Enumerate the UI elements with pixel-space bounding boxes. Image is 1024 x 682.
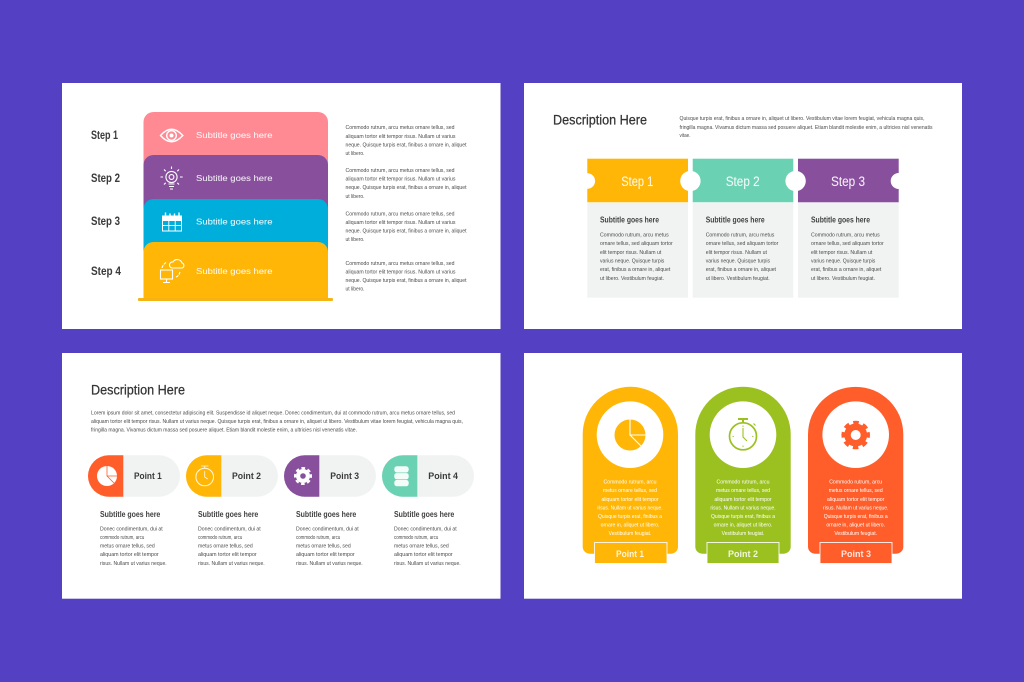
intro text: Quisque turpis erat, finibus a ornare in, aliquet ut libero. Vestibulum vitae lorem feugiat, vehicula magna quis, [680,116,925,122]
card text: step 2: Subtitle goes here [706,216,765,225]
layer subtitles: Subtitle goes here [196,216,273,226]
intro text: vitae. [680,133,691,139]
step headers: Step 2 [726,174,760,189]
descriptions: neque. Quisque turpis erat, finibus a ornare in, aliquet [346,229,467,235]
arch card 2: aliquam tortor elit tempor [714,497,772,503]
point text 2: Donec condimentum, dui at [198,527,261,533]
intro text: fringilla magna. Vivamus dictum massa sed posuere aliquet. Etiam blandit molestie enim, a ultricies nisl venenatis [680,125,933,131]
point text 1: aliquam tortor elit tempor [100,552,159,558]
point text 3: aliquam tortor elit tempor [296,552,355,558]
card text: step 3: varius neque. Quisque turpis [811,259,875,265]
heading: Description Here [553,112,647,128]
arch card 3 [808,387,903,564]
card text: step 3: Subtitle goes here [811,216,871,225]
point pill 1: Point 1 [134,471,162,482]
point text 1: metus ornare tellus, sed [100,544,155,550]
step headers: Step 3 [831,174,865,189]
descriptions: aliquam tortor elit tempor risus. Nullam ut varius [346,134,456,140]
point pill 2: Point 2 [232,471,261,482]
arch card 1: metus ornare tellus, sed [603,488,657,494]
step headers: Step 1 [621,174,653,189]
card text: step 2: Commodo rutrum, arcu metus [706,233,774,239]
point text 2 [198,510,265,567]
icon: light bulb [160,166,183,189]
arch card 3: aliquam tortor elit tempor [827,497,884,503]
step labels [91,130,122,278]
card text: step 2 [706,216,778,282]
point pill 1 [88,455,180,497]
icon: stopwatch [730,419,756,450]
card text: step 3 [811,216,884,282]
descriptions: neque. Quisque turpis erat, finibus a ornare in, aliquet [346,142,467,148]
step labels: Step 3 [91,216,120,228]
layer subtitles: Subtitle goes here [196,266,273,276]
card text: step 3: Commodo rutrum, arcu metus [811,233,880,239]
card text: step 1 [600,216,673,282]
tab: Point 2 [728,549,758,560]
point text 3: commodo rutrum, arcu [296,535,340,541]
point text 4: Donec condimentum, dui at [394,527,457,533]
intro text: aliquam tortor elit tempor risus. Nullam ut varius neque. Quisque turpis erat, finibus a ornare in, aliquet ut libero. Vestibulum vitae lorem feugiat, vehicula magna quis, [91,419,463,425]
arch card 1: Vestibulum feugiat. [609,531,652,537]
layer subtitles: Subtitle goes here [196,130,273,140]
tab [820,542,892,564]
descriptions: ut libero. [346,287,365,293]
arch card 2: ornare in, aliquet ut libero. [714,523,773,529]
card text: step 1: Subtitle goes here [600,216,660,225]
point text 2: risus. Nullam ut varius neque. [198,561,265,567]
descriptions: aliquam tortor elit tempor risus. Nullam ut varius [346,177,456,183]
point text 4 [394,510,461,567]
card bodies [587,203,899,298]
card text: step 1: ut libero. Vestibulum feugiat. [600,276,664,282]
step labels: Step 4 [91,266,122,278]
card text: step 1: varius neque. Quisque turpis [600,259,664,265]
descriptions: Commodo rutrum, arcu metus ornare tellus, sed [346,261,454,267]
card text: step 3: ornare tellus, sed aliquam tortor [811,241,884,247]
point text 4: commodo rutrum, arcu [394,535,438,541]
panel: ticket steps [524,83,962,329]
arch card 1: risus. Nullam ut varius neque. [597,506,663,512]
card text: step 2: elit tempor risus. Nullam ut [706,250,767,256]
card text: step 2: ornare tellus, sed aliquam tortor [706,241,778,247]
step headers [580,159,907,202]
point text 4: risus. Nullam ut varius neque. [394,561,461,567]
card text: step 2: ut libero. Vestibulum feugiat. [706,276,770,282]
arch card 3: ornare in, aliquet ut libero. [826,523,885,529]
arch card 2: Commodo rutrum, arcu [716,480,770,486]
descriptions: aliquam tortor elit tempor risus. Nullam ut varius [346,220,456,226]
arch card 1: ornare in, aliquet ut libero. [601,523,660,529]
arch card 3: risus. Nullam ut varius neque. [823,506,889,512]
arch card 2: risus. Nullam ut varius neque. [710,506,776,512]
descriptions: Commodo rutrum, arcu metus ornare tellus, sed [346,168,454,174]
point text 3 [296,510,363,567]
arch card 2: Vestibulum feugiat. [722,531,765,537]
panel: four points [62,353,500,599]
point text 1: Donec condimentum, dui at [100,527,163,533]
arch card 2: metus ornare tellus, sed [716,488,770,494]
arch card 1: Quisque turpis erat, finibus a [598,514,663,520]
point text 2: commodo rutrum, arcu [198,535,242,541]
step labels: Step 1 [91,130,118,142]
tab: Point 3 [841,549,871,560]
icon: pie chart [614,418,647,450]
card text: step 3: ut libero. Vestibulum feugiat. [811,276,875,282]
arch card 2 [695,387,791,564]
descriptions: ut libero. [346,151,365,157]
arch card 2: Quisque turpis erat, finibus a [711,514,776,520]
point pill 4 [382,455,474,497]
descriptions: Commodo rutrum, arcu metus ornare tellus, sed [346,125,454,131]
card text: step 1: elit tempor risus. Nullam ut [600,250,662,256]
intro text [680,116,933,139]
arch card 1: aliquam tortor elit tempor [601,497,659,503]
point text 2: aliquam tortor elit tempor [198,552,257,558]
layer subtitles: Subtitle goes here [196,173,273,183]
panel: arch cards [524,353,962,599]
card text: step 1: erat, finibus a ornare in, aliquet [600,267,671,273]
icon: calendar [162,212,182,231]
descriptions: neque. Quisque turpis erat, finibus a ornare in, aliquet [346,278,467,284]
point pill 2 [186,455,278,497]
point text 3: risus. Nullam ut varius neque. [296,561,363,567]
layer subtitles [196,130,273,276]
card text: step 1: ornare tellus, sed aliquam tortor [600,241,673,247]
point text 3: Subtitle goes here [296,510,357,519]
point text 4: metus ornare tellus, sed [394,544,449,550]
card text: step 3: elit tempor risus. Nullam ut [811,250,873,256]
descriptions: neque. Quisque turpis erat, finibus a ornare in, aliquet [346,185,467,191]
point pill 3 [284,455,376,497]
descriptions: ut libero. [346,194,365,200]
icon: eye [160,129,183,142]
tab: Point 1 [616,549,645,560]
arch card 3: Quisque turpis erat, finibus a [824,514,888,520]
point text 4: Subtitle goes here [394,510,455,519]
heading: Description Here [91,382,185,397]
point text 2: metus ornare tellus, sed [198,544,253,550]
tab [594,542,667,564]
point text 4: aliquam tortor elit tempor [394,552,453,558]
icon: gear [841,420,871,450]
arch card 1: Commodo rutrum, arcu [604,480,656,486]
arch card 1 [583,387,678,564]
icon: cloud and monitor [160,260,184,282]
tab [707,542,779,564]
stacked coloured layers [138,112,333,301]
descriptions [346,125,467,293]
descriptions: ut libero. [346,237,365,243]
descriptions: aliquam tortor elit tempor risus. Nullam ut varius [346,270,456,276]
point text 2: Subtitle goes here [198,510,259,519]
card text: step 2: erat, finibus a ornare in, aliquet [706,267,776,273]
intro text [91,411,463,434]
arch card 3: metus ornare tellus, sed [829,488,883,494]
arch card 3: Commodo rutrum, arcu [829,480,882,486]
point text 3: Donec condimentum, dui at [296,527,359,533]
panel: stacked steps [62,83,500,329]
point pill 3: Point 3 [330,471,359,482]
step labels: Step 2 [91,173,120,185]
point text 3: metus ornare tellus, sed [296,544,351,550]
point text 1: Subtitle goes here [100,510,161,519]
point text 1 [100,510,167,567]
point text 1: risus. Nullam ut varius neque. [100,561,167,567]
intro text: Lorem ipsum dolor sit amet, consectetur adipiscing elit. Suspendisse id aliquet neque. Donec condimentum, dui at commodo rutrum, arcu metus ornare tellus, sed [91,411,455,417]
arch card 3: Vestibulum feugiat. [834,531,877,537]
card text: step 2: varius neque. Quisque turpis [706,259,770,265]
card text: step 3: erat, finibus a ornare in, aliquet [811,267,882,273]
point text 1: commodo rutrum, arcu [100,535,144,541]
intro text: fringilla magna. Vivamus dictum massa sed posuere aliquet. Etiam blandit molestie enim, a ultricies nisl venenatis vitae. [91,428,357,434]
point pill 4: Point 4 [428,471,459,482]
descriptions: Commodo rutrum, arcu metus ornare tellus, sed [346,211,454,217]
card text: step 1: Commodo rutrum, arcu metus [600,233,669,239]
